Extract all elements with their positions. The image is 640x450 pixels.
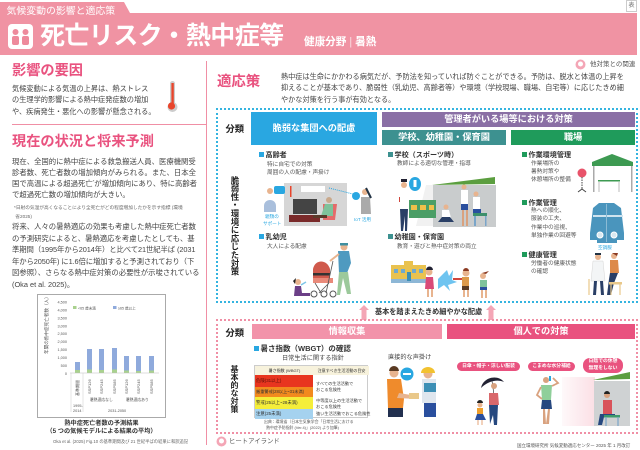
current situation text: で超過死亡数の増加傾向が大きい。 — [12, 190, 130, 199]
bar chart: 暑熱適応なし — [90, 397, 113, 402]
adaptation text: やかな対策を行う事が有効となる。 — [281, 96, 395, 104]
illustration: man drinking — [536, 376, 560, 424]
work management text: 服装の工夫、 — [531, 216, 565, 222]
bar chart — [37, 294, 166, 418]
bar chart: 暑熱適応あり — [126, 397, 149, 402]
band: information — [252, 324, 442, 339]
projection text: の予測研究によると、暑熱適応を考慮したとしても、基 — [12, 234, 195, 243]
pill: parasol — [457, 362, 520, 371]
bar chart: 1,500 — [57, 348, 67, 352]
bar chart: 500 — [61, 364, 67, 368]
table source: 出典：環境省（日本生気象学会「日常生活における — [264, 419, 353, 424]
pill: hydration — [528, 362, 575, 371]
illustration: doctor and patient — [588, 253, 622, 295]
kindergarten text: 教育・遊びと熱中症対策の両立 — [397, 244, 477, 250]
projection text: (Oka et al. 2025)。 — [12, 280, 74, 289]
panel: basic measures — [216, 319, 638, 434]
WBGT heading: 暑さ指数（WBGT）の確認 — [260, 344, 351, 353]
table source — [264, 419, 353, 430]
illustration: mother and stroller — [293, 243, 351, 298]
bar chart: 3,500 — [57, 316, 67, 320]
work environment heading: 作業環境管理 — [528, 150, 571, 158]
caution row — [255, 409, 313, 419]
work environment text — [531, 160, 571, 183]
title: 死亡リスク・熱中症等 — [40, 22, 284, 50]
pill: hydration: こまめな水分補給 — [532, 364, 571, 369]
health management text: の確認 — [531, 269, 548, 275]
work management heading: 作業管理 — [528, 198, 557, 206]
bar chart: 年間の熱中症死亡者数（人） — [43, 294, 50, 354]
arrow: right up — [486, 305, 496, 320]
icon: people — [8, 24, 33, 49]
chart source: Oka et al. (2025) Fig.10 の基準期間及び 21 世紀半ばの結果に和訳追記 — [53, 439, 188, 444]
sector label: 健康分野 | 暑熱 — [304, 36, 376, 48]
work management text: 熱への順化、 — [531, 208, 565, 214]
bar chart: 4,000 — [57, 308, 67, 312]
bar chart: SSP245 — [136, 379, 141, 394]
direct calling label: 直接的な声掛け — [388, 354, 431, 361]
footnote: *日射の気温が高くなることにより全死亡がどの程度増加したかを示す指標 (環境 — [14, 204, 183, 210]
elderly text: 特に自宅での対策 — [267, 162, 312, 168]
warning row — [255, 397, 313, 409]
current situation text: 現在、全国的に熱中症による救急搬送人員、医療機関受 — [12, 156, 196, 166]
heat island link — [216, 436, 280, 446]
health management text — [531, 260, 576, 275]
related measures — [576, 60, 636, 70]
illustration: school sports — [399, 177, 496, 231]
kindergarten heading: 幼稚園・保育園 — [394, 233, 444, 241]
bar chart: 2,000 — [57, 340, 67, 344]
illustration: elderly at home: IoT 活用 — [354, 216, 371, 223]
projection text: 将来、人々の暑熱適応の効果も考慮した熱中症死亡者数 — [12, 222, 196, 231]
illustration: children with water — [391, 261, 489, 298]
work management text: 単独作業の回避等 — [531, 233, 576, 239]
causes text: や、疾病発生・悪化への影響が懸念される。 — [12, 107, 156, 116]
caution row: 注意(25未満) — [256, 411, 281, 416]
illustration: elderly at home: サポート — [263, 220, 281, 227]
work environment text: 作業場所の — [531, 161, 559, 167]
footnote: 省2025) — [15, 214, 32, 218]
infants heading: 乳幼児 — [266, 233, 287, 241]
icon: thermometer — [168, 81, 178, 112]
health management heading: 健康管理 — [528, 250, 557, 258]
illustration: cooling jacket: 空調服 — [598, 245, 612, 251]
WBGT table — [254, 365, 368, 418]
header band — [0, 2, 637, 55]
work management text: 作業中の巡視、 — [531, 225, 571, 231]
bar chart: 基準期間 — [74, 380, 80, 396]
illustration: cooling jacket — [590, 203, 624, 251]
chart caption: （5 つの気候モデルによる結果の平均） — [46, 428, 157, 435]
heading: adaptation: 適応策 — [217, 74, 260, 90]
bar chart: SSP126 — [87, 379, 92, 394]
band: schools: 学校、幼稚園・保育園 — [398, 132, 490, 142]
bar chart: ≥65 歳以上 — [118, 306, 136, 310]
bar chart: 4,500 — [57, 300, 67, 304]
left column divider — [206, 61, 207, 445]
illustration: calling out — [387, 366, 436, 417]
work environment text: 暑熱対策や — [531, 169, 559, 175]
band: vulnerable groups: 脆弱な集団への配慮 — [273, 123, 355, 133]
school text: 教師による適切な管理・指導 — [397, 161, 471, 167]
projection text — [12, 222, 199, 289]
activity text — [316, 398, 362, 409]
projection text: 図参照）、さらなる熱中症対策の必要性が示唆されている — [12, 268, 199, 277]
vertical label: 脆弱性・環境に応じた対策 — [230, 176, 240, 276]
pill: rest — [583, 358, 623, 373]
band: managed places: 管理者がいる場等における対策 — [444, 114, 573, 124]
projection text: 年から2050年) に1.6倍に増加すると予測されており（下 — [12, 257, 194, 266]
infants text: 大人による配慮 — [267, 244, 307, 250]
elderly text: 周囲の人の配慮・声掛け — [267, 170, 330, 176]
band: information: 情報収集 — [329, 326, 365, 336]
band: individual — [447, 324, 635, 339]
bar chart: 2031-2050 — [108, 409, 126, 413]
projection text: 準期間（1995年から2014年）と比べて21世紀半ば (2031 — [12, 245, 195, 254]
illustration: elderly at home — [263, 183, 372, 227]
work management text — [531, 207, 576, 239]
connector label: 基本を踏まえたきめ細やかな配慮 — [375, 308, 482, 316]
category label: 分類 — [226, 328, 244, 338]
danger row — [255, 375, 313, 387]
band: workplace: 職場 — [564, 132, 582, 142]
adaptation text: 抑えることが基本であり、脆弱性（乳幼児、高齢者等）や環境（学校現場、職場、自宅等）に応じたきめ細 — [281, 84, 624, 92]
footer credit: 国立環境研究所 気候変動適応センター 2025 年 1 月改訂 — [517, 443, 630, 448]
WBGT subtitle: 日常生活に関する指針 — [282, 355, 344, 362]
adaptation text — [281, 72, 624, 104]
activity text — [316, 381, 353, 392]
heat island link: ヒートアイランド — [229, 438, 280, 445]
bar chart: 0 — [65, 372, 67, 376]
bar chart: 2,500 — [57, 332, 67, 336]
icon: table tab: 表 — [628, 3, 634, 9]
activity text: 中等度以上の生活活動で — [316, 398, 362, 403]
band: workplace — [511, 130, 635, 145]
band: individual: 個人での対策 — [513, 326, 569, 336]
elderly heading: 高齢者 — [266, 150, 287, 158]
illustration: shade rest — [564, 372, 630, 426]
bar chart: 2014 — [73, 409, 81, 413]
pill: rest: 日陰での休憩 — [589, 359, 617, 364]
arrow: left up — [359, 305, 369, 320]
activity text: おこる危険性 — [316, 386, 341, 392]
health management text: 労働者の健康状態 — [531, 261, 576, 267]
chart caption: 熱中症死亡者数の予測結果 — [64, 420, 139, 427]
band: managed places — [382, 112, 635, 127]
severe row: 厳重警戒(28以上~31未満) — [256, 389, 304, 394]
bar chart: SSP585 — [112, 379, 117, 394]
bar chart: SSP126 — [124, 379, 129, 394]
related measures: 他対策との関連 — [590, 61, 635, 68]
current situation text: 診者数、死亡者数の増加傾向がみられる。また、日本全 — [12, 168, 196, 177]
activity text: 強い生活活動でおこる危険性 — [316, 411, 370, 416]
illustration: fan and tent — [578, 154, 633, 192]
WBGT table: 注意すべき生活活動の目安 — [318, 368, 365, 373]
current situation text — [12, 156, 197, 199]
band: schools — [382, 130, 506, 145]
table header — [255, 366, 313, 375]
vertical label: 基本的な対策 — [230, 365, 239, 413]
icon: table tab — [626, 0, 637, 12]
bar chart: SSP585 — [149, 379, 154, 394]
danger row: 危険(31以上) — [256, 378, 281, 383]
header subtitle: 気候変動の影響と適応策 — [6, 6, 115, 17]
bar chart: <65 歳未満 — [78, 306, 96, 310]
illustration: elderly at home: 親類の — [265, 213, 279, 220]
elderly text — [267, 161, 330, 176]
bar chart: 1,000 — [57, 356, 67, 360]
adaptation text: 熱中症は生命にかかわる病気だが、予防法を知っていれば防ぐことができる。予防は、脱水と体温の上昇を — [281, 72, 624, 80]
activity text: すべての生活活動で — [316, 381, 353, 386]
work environment text: 休憩場所の整備 — [531, 177, 571, 183]
category label: 分類 — [226, 124, 244, 134]
bar chart: 3,000 — [57, 324, 67, 328]
band: vulnerable groups — [251, 112, 377, 145]
warning row: 警戒(25以上~28未満) — [256, 400, 298, 405]
table source: 熱中症予防指針 (Ver.4)」(2022) より加筆) — [266, 424, 339, 430]
school heading: 学校（スポーツ時） — [394, 150, 458, 158]
table header: 暑さ指数 (WBGT) — [269, 368, 300, 373]
chart caption — [46, 419, 157, 435]
pill: parasol: 日傘・帽子・涼しい服装 — [462, 364, 515, 369]
pill: rest: 無理をしない — [589, 366, 617, 370]
activity text: おこる危険性 — [316, 404, 341, 408]
heading: current situation: 現在の状況と将来予測 — [12, 134, 154, 150]
causes text — [12, 84, 156, 116]
panel: vulnerability measures — [216, 108, 638, 303]
bar chart: 1995- — [73, 404, 83, 408]
causes text: の生理学的影響による熱中症発症数の増加 — [12, 95, 148, 104]
footnote — [14, 204, 183, 219]
bar chart: SSP245 — [99, 379, 104, 394]
section divider — [12, 124, 207, 125]
current situation text: 国で高温による超過死亡*が増加傾向にあり、特に高齢者 — [12, 178, 197, 188]
illustration: parasol and child — [475, 378, 504, 425]
severe row — [255, 387, 313, 397]
causes text: 気候変動による気温の上昇は、熱ストレス — [12, 84, 148, 92]
heading: causes: 影響の要因 — [12, 63, 83, 79]
